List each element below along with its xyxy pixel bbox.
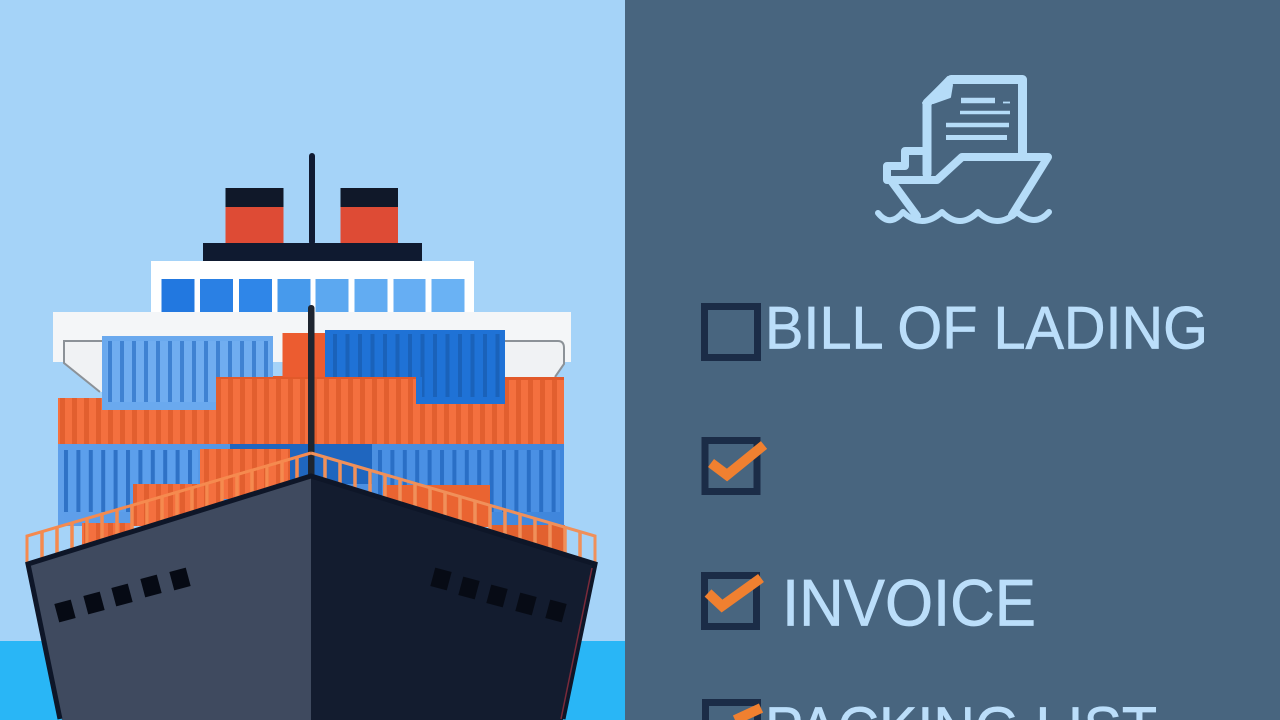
hull left portholes: [54, 568, 191, 622]
right funnel: [340, 188, 398, 244]
illustration: container ship: [27, 153, 595, 720]
panel: sky background: [0, 0, 625, 720]
label: invoice: INVOICE: [782, 566, 1036, 640]
hull outline: [28, 476, 595, 719]
document lines: [946, 100, 1010, 138]
middle orange container row: [58, 376, 564, 444]
left bridge wing: [64, 341, 200, 392]
dark blue container: [325, 330, 505, 404]
bridge windows: [162, 279, 464, 312]
bridge superstructure: [151, 261, 474, 316]
light blue container: [102, 336, 273, 410]
label: bill of lading: BILL OF LADING: [765, 294, 1208, 362]
foremast: [308, 305, 314, 477]
document outline: [927, 80, 1022, 174]
lower blue containers: [58, 444, 564, 526]
checklist item: packing list: [706, 695, 1157, 720]
checkbox: empty: [704, 306, 758, 358]
checkmark: [711, 445, 764, 475]
panel: checklist background: [625, 0, 1280, 720]
checklist item: blank ticked row: [705, 440, 764, 492]
checklist item: invoice: [704, 566, 1036, 640]
checkbox: frame: [706, 702, 758, 720]
left bow railing: [27, 453, 311, 562]
hull right edge highlight: [561, 568, 592, 719]
left funnel: [226, 188, 284, 244]
hull right portholes: [430, 568, 567, 622]
checkbox: frame: [704, 576, 756, 626]
upper deck: [203, 243, 422, 261]
icon: ship carrying a document: [878, 77, 1049, 221]
hull left side: [27, 476, 311, 720]
checkbox: frame: [705, 440, 757, 492]
ship mast: [309, 153, 315, 245]
hull right side: [311, 476, 595, 720]
panel: sea: [0, 641, 625, 720]
document fold: [923, 77, 952, 103]
checkmark: [708, 578, 761, 606]
right bridge wing: [505, 341, 564, 377]
lower white deck: [53, 312, 571, 362]
checklist item: bill of lading: [704, 294, 1208, 362]
lower orange containers: [82, 449, 565, 555]
right bow railing: [311, 453, 595, 562]
centre orange container: [282, 333, 326, 377]
ship hull outline: [887, 151, 1048, 216]
checkmark: [735, 708, 761, 720]
waves: [878, 212, 1049, 221]
